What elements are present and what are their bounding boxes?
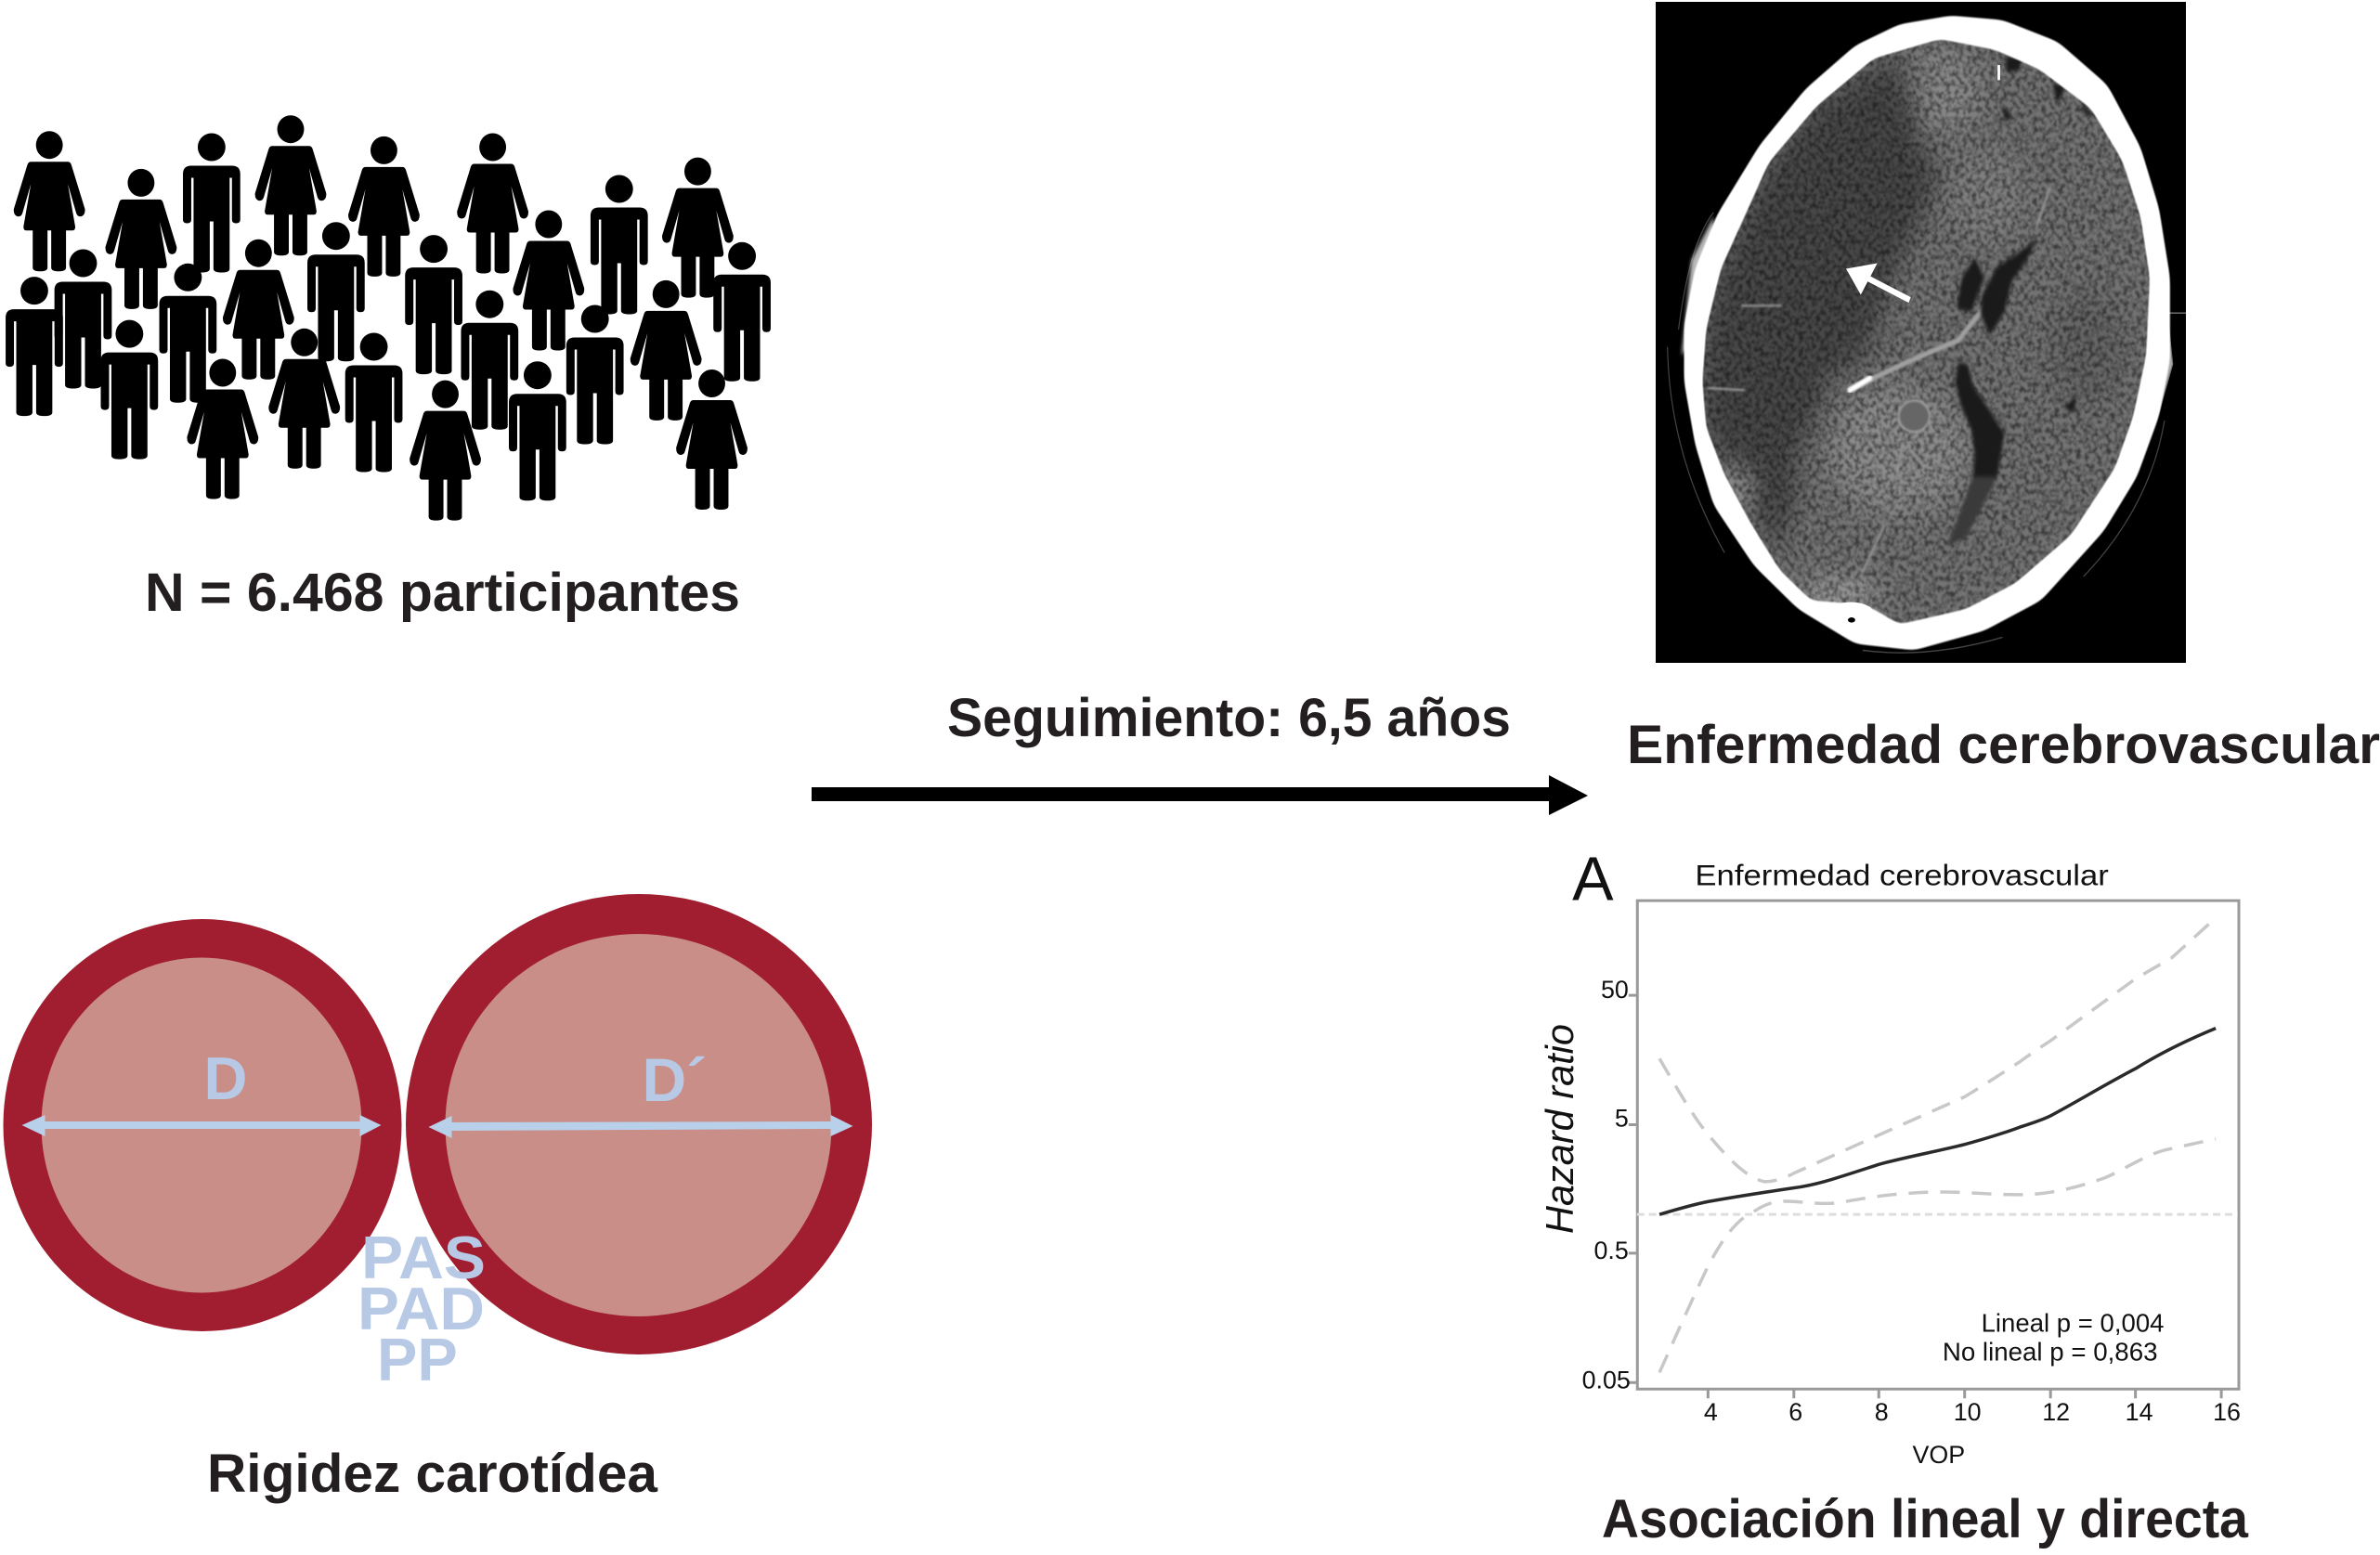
label: D: D (204, 1044, 247, 1112)
small bone details (1996, 65, 2002, 80)
midline and falx streaks (1850, 304, 1988, 390)
y axis title: Hazard ratio (1538, 1024, 1581, 1234)
artery: systole (406, 894, 872, 1354)
x axis tick labels (1704, 1398, 2241, 1426)
p values (1943, 1309, 2164, 1366)
y axis tick labels: 50 (1601, 976, 1629, 1004)
x axis tick labels: 12 (2042, 1398, 2070, 1426)
x axis tick labels: 16 (2213, 1398, 2241, 1426)
label: D prime: D´ (643, 1045, 707, 1114)
lower confidence limit (1659, 1139, 2216, 1372)
p values: No lineal p = 0,863 (1943, 1337, 2158, 1366)
labels: blood pressure (358, 1224, 486, 1393)
labels: blood pressure: PP (377, 1326, 458, 1393)
ring structure (1899, 401, 1930, 432)
x axis tick labels: 4 (1704, 1398, 1718, 1426)
x axis tick labels: 6 (1788, 1398, 1802, 1426)
heading: follow-up: Seguimiento: 6,5 años (947, 688, 1511, 748)
p values: Lineal p = 0,004 (1982, 1309, 2164, 1338)
plot frame and ticks (1629, 901, 2239, 1398)
skull (1684, 16, 2170, 650)
panel: crowd of participants (6, 115, 771, 521)
y axis tick labels: 0.05 (1582, 1366, 1631, 1393)
panel: artery diagrams (4, 894, 872, 1393)
y axis tick labels: 0.5 (1594, 1237, 1629, 1264)
arrow: infarct pointer (1846, 263, 1910, 300)
labels: blood pressure: PAD (358, 1275, 485, 1342)
brain tissue (1702, 39, 2151, 624)
artery: diastole (4, 919, 401, 1331)
upper confidence limit (1659, 921, 2212, 1182)
x axis tick labels: 10 (1954, 1398, 1982, 1426)
heading: cerebrovascular disease: Enfermedad cerebrovascular (1627, 715, 2380, 775)
icon: participant group (6, 115, 771, 521)
y axis tick labels: 5 (1615, 1105, 1629, 1133)
heading: association: Asociación lineal y directa (1602, 1489, 2249, 1549)
arrow: diameter D prime (429, 1115, 852, 1138)
heading: carotid stiffness: Rigidez carotídea (207, 1444, 658, 1504)
x axis title: VOP (1913, 1441, 1965, 1469)
heading: participants: N = 6.468 participantes (145, 563, 740, 623)
panel: CT scan (1656, 2, 2186, 663)
panel: hazard ratio chart (1538, 846, 2241, 1469)
arrow: diameter D (22, 1115, 381, 1136)
y axis tick labels (1582, 976, 1631, 1393)
label: panel letter: A (1572, 846, 1614, 914)
labels: blood pressure: PAS (361, 1224, 486, 1291)
x axis tick labels: 8 (1875, 1398, 1889, 1426)
arrow: follow-up timeline (812, 775, 1588, 815)
hazard ratio curve (1659, 1029, 2216, 1214)
reference line at HR 1 (1637, 1213, 2238, 1216)
ventricles (1947, 57, 2095, 546)
chart title: Enfermedad cerebrovascular (1695, 859, 2109, 892)
x axis tick labels: 14 (2126, 1398, 2153, 1426)
skin edge marks (1668, 213, 2165, 653)
